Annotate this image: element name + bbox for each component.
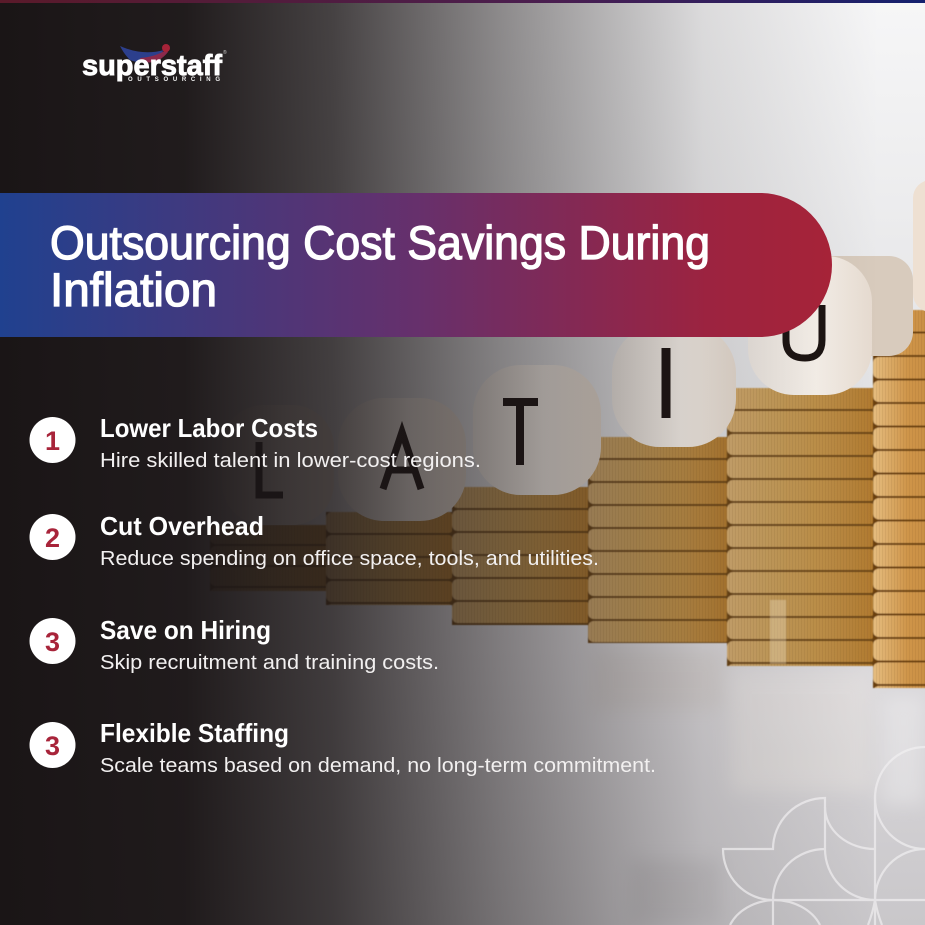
item 4: flexible staffing: 3 (45, 731, 60, 761)
logo registered mark: ® (223, 49, 227, 56)
item 2: cut overhead: 2 (45, 523, 60, 553)
floor reflections of the coin stacks (592, 650, 925, 925)
item 1: lower labor costs: 1 (45, 426, 60, 456)
top colour strip (0, 0, 925, 3)
item 3: save on hiring (30, 615, 439, 674)
logo tagline: OUTSOURCING (128, 77, 220, 83)
die O (748, 256, 913, 395)
item 2: cut overhead (30, 511, 599, 570)
item 4: flexible staffing: Scale teams based on demand, no long-term commitment. (100, 755, 656, 777)
item 1: lower labor costs: Lower Labor Costs (100, 413, 318, 443)
logo wordmark: superstaff (82, 50, 222, 82)
item 1: lower labor costs (30, 413, 481, 472)
die A (338, 398, 466, 521)
die top right (913, 180, 925, 312)
die L (222, 405, 334, 525)
item 4: flexible staffing (30, 718, 656, 777)
item 4: flexible staffing: Flexible Staffing (100, 718, 289, 748)
coin stack I (588, 437, 731, 643)
coin stack O (727, 388, 876, 666)
coin stack L (210, 525, 332, 591)
decorative geometric line pattern (723, 747, 925, 925)
item 3: save on hiring: Skip recruitment and training costs. (100, 652, 439, 674)
coin stack T (452, 487, 592, 625)
title: Inflation (50, 263, 217, 316)
title banner (0, 193, 832, 337)
item 1: lower labor costs: Hire skilled talent in lower-cost regions. (100, 450, 481, 472)
logo swoosh (120, 44, 170, 63)
item 3: save on hiring: Save on Hiring (100, 615, 271, 645)
item 2: cut overhead: Reduce spending on office space, tools, and utilities. (100, 548, 599, 570)
logo (82, 44, 227, 83)
coin stack A (326, 512, 454, 605)
die I (612, 325, 736, 447)
coin stack right (873, 310, 925, 688)
die T (473, 365, 601, 495)
item 2: cut overhead: Cut Overhead (100, 511, 264, 541)
item 3: save on hiring: 3 (45, 627, 60, 657)
title: Outsourcing Cost Savings During (50, 216, 710, 269)
